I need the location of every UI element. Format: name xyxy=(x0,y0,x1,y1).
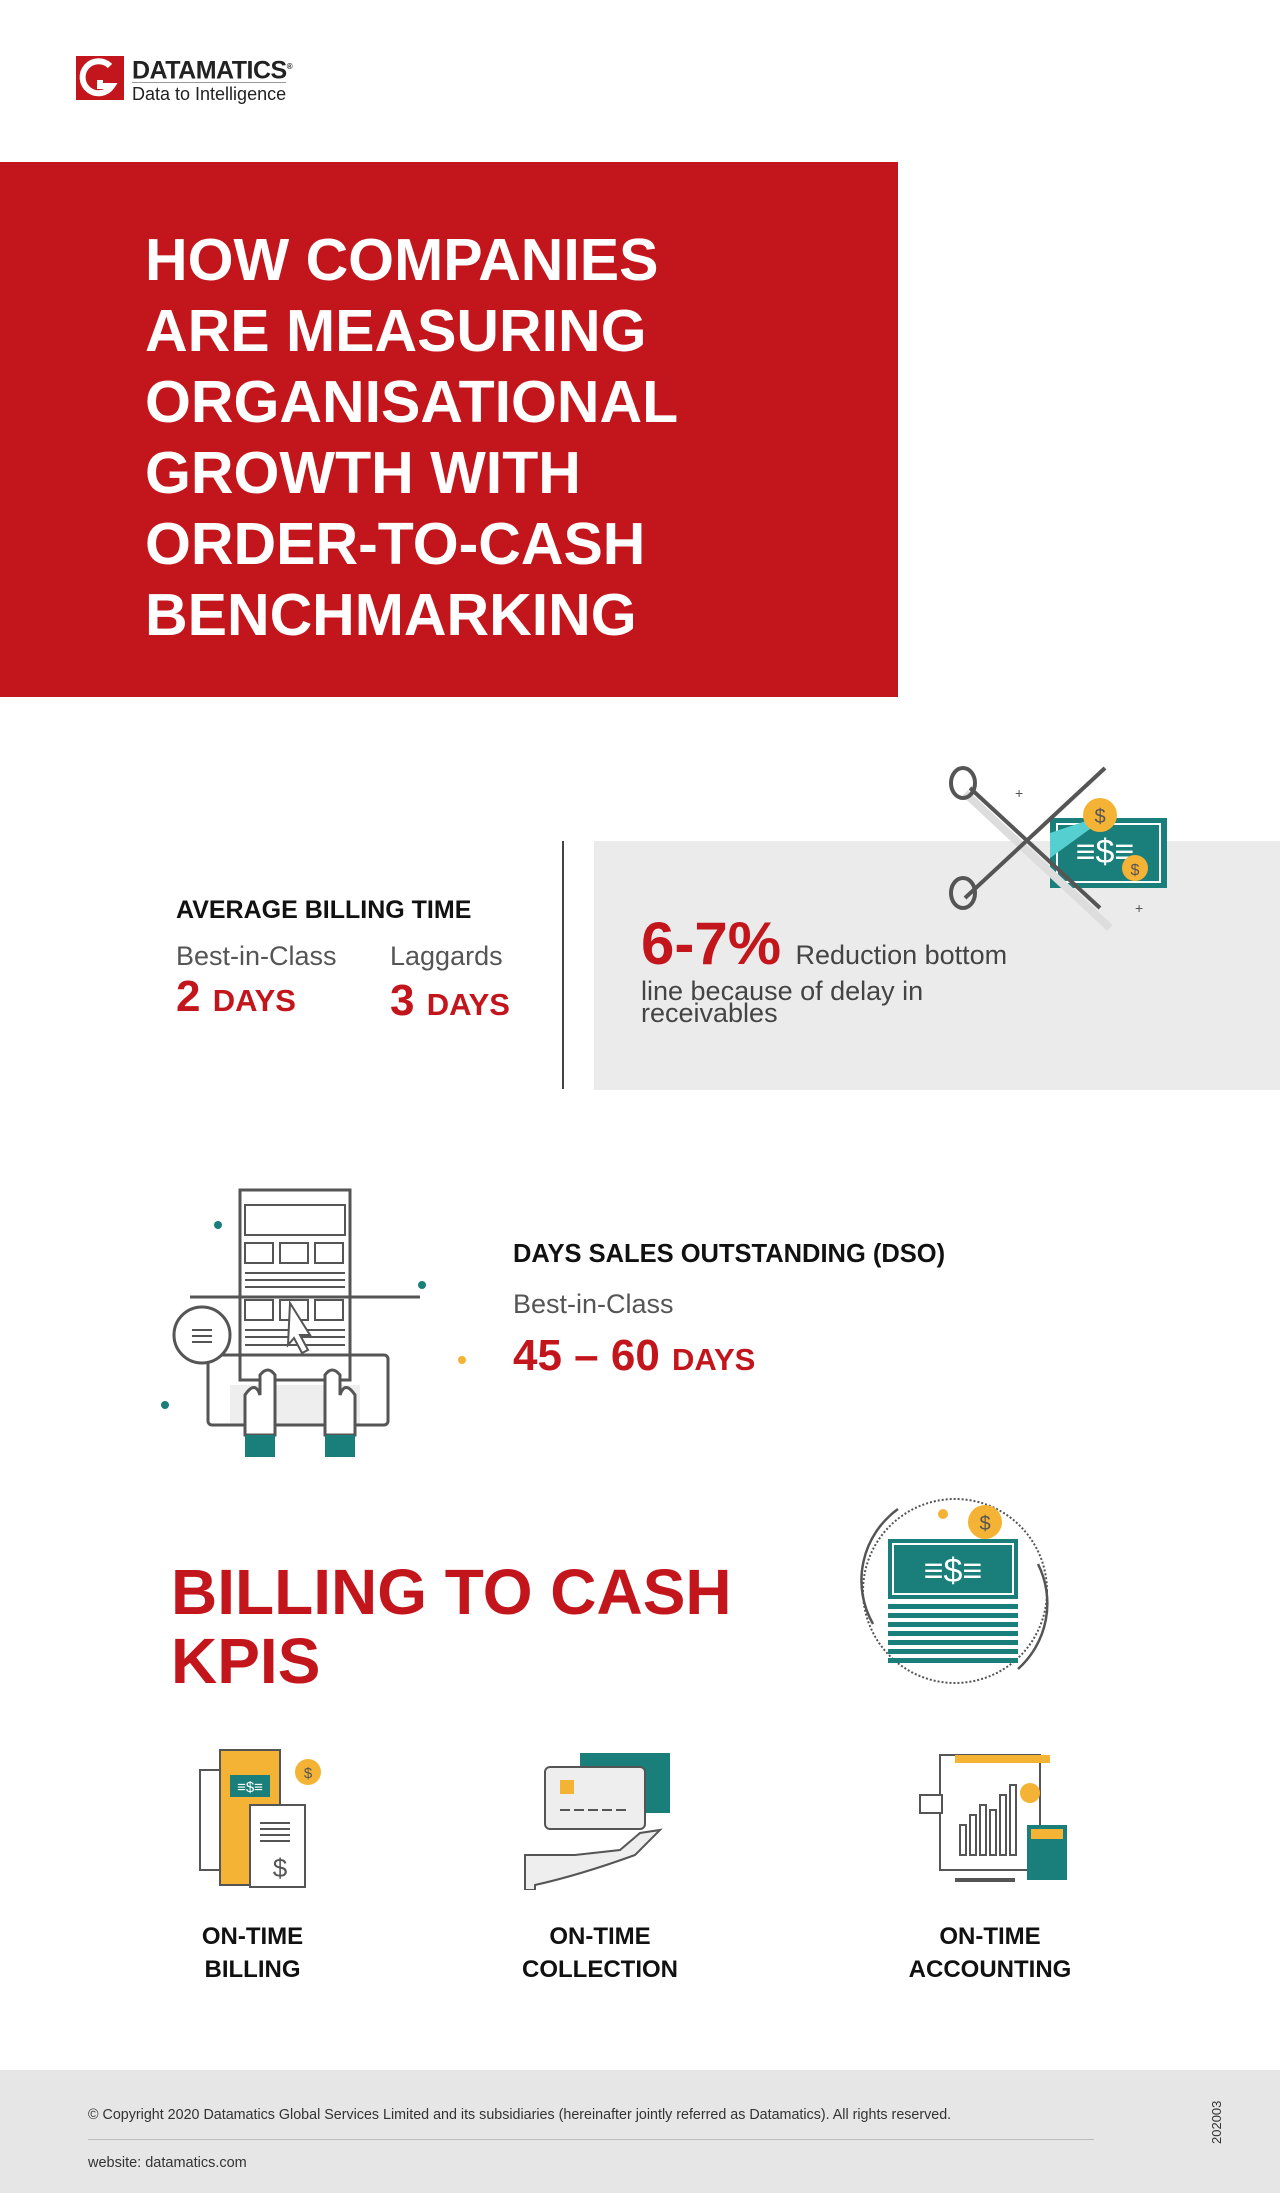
title: ARE MEASURING xyxy=(145,298,647,364)
stat 6-7%: 6-7% Reduction bottom xyxy=(641,910,1007,977)
heading: DAYS SALES OUTSTANDING (DSO) xyxy=(513,1240,945,1268)
icon: scissors cutting money: + xyxy=(1015,785,1023,801)
label: ON-TIME xyxy=(549,1923,651,1950)
copyright: © Copyright 2020 Datamatics Global Services Limited and its subsidiaries (hereinafter jointly referred as Datamatics). All rights reserved. xyxy=(88,2107,951,2123)
icon: scissors cutting money: $ xyxy=(1131,862,1140,879)
icon: cash stack cycle: $ xyxy=(979,1513,991,1535)
icon: logo mark xyxy=(76,56,124,100)
icon: laptop with form xyxy=(161,1188,466,1457)
label: ACCOUNTING xyxy=(909,1956,1071,1983)
icon: scissors cutting money: + xyxy=(1135,900,1143,916)
icon: scissors cutting money xyxy=(949,766,1167,930)
KPI: on-time billing xyxy=(199,1749,321,1983)
best in class: Best-in-Class xyxy=(176,941,337,971)
brand name: DATAMATICS® xyxy=(132,56,292,84)
title: BENCHMARKING xyxy=(145,582,637,648)
website: website: datamatics.com xyxy=(88,2155,247,2171)
icon: card in hand xyxy=(524,1753,670,1890)
panel: average billing time: 2 DAYS xyxy=(176,972,296,1021)
value: 45 – 60 DAYS xyxy=(513,1331,755,1380)
logo: Data to Intelligence xyxy=(132,84,286,104)
footer xyxy=(0,2070,1280,2193)
icon: cash stack cycle: ≡$≡ xyxy=(924,1552,982,1590)
label xyxy=(522,1923,678,1983)
icon: invoices xyxy=(199,1749,321,1888)
best in class label: Best-in-Class xyxy=(513,1289,674,1319)
KPI: on-time accounting xyxy=(909,1754,1071,1983)
title: ORGANISATIONAL xyxy=(145,369,678,435)
title: HOW COMPANIES xyxy=(145,227,659,293)
logo xyxy=(76,56,292,104)
title: ORDER-TO-CASH xyxy=(145,511,645,577)
KPI: on-time collection xyxy=(522,1753,678,1983)
title xyxy=(145,227,678,648)
label: ON-TIME xyxy=(202,1923,303,1950)
heading: AVERAGE BILLING TIME xyxy=(176,896,471,924)
description: line because of delay in xyxy=(641,976,923,1006)
title panel xyxy=(0,162,898,697)
icon: invoices: $ xyxy=(304,1765,313,1782)
panel: reduction xyxy=(594,841,1280,1090)
panel: DSO xyxy=(513,1240,945,1380)
code: 202003 xyxy=(1209,2101,1224,2144)
icon: invoices: ≡$≡ xyxy=(237,1779,263,1796)
icon: report with chart and calculator xyxy=(919,1754,1067,1882)
label: COLLECTION xyxy=(522,1956,678,1983)
divider line xyxy=(562,841,564,1089)
icon: cash stack cycle xyxy=(860,1498,1049,1684)
heading: billing to cash KPIs: KPIS xyxy=(171,1625,320,1697)
description xyxy=(641,976,923,1028)
heading: billing to cash KPIs xyxy=(171,1556,732,1697)
panel: average billing time xyxy=(176,896,510,1025)
description: receivables xyxy=(641,998,778,1028)
icon: scissors cutting money: $ xyxy=(1094,806,1106,828)
laggards: Laggards xyxy=(390,941,503,971)
label: ON-TIME xyxy=(939,1923,1041,1950)
label: BILLING xyxy=(204,1956,300,1983)
heading: billing to cash KPIs: BILLING TO CASH xyxy=(171,1556,732,1628)
label xyxy=(909,1923,1071,1983)
label xyxy=(202,1923,303,1983)
icon: invoices: $ xyxy=(273,1853,288,1883)
panel: average billing time: 3 DAYS xyxy=(390,976,510,1025)
icon: scissors cutting money: ≡$≡ xyxy=(1076,833,1134,871)
title: GROWTH WITH xyxy=(145,440,581,506)
